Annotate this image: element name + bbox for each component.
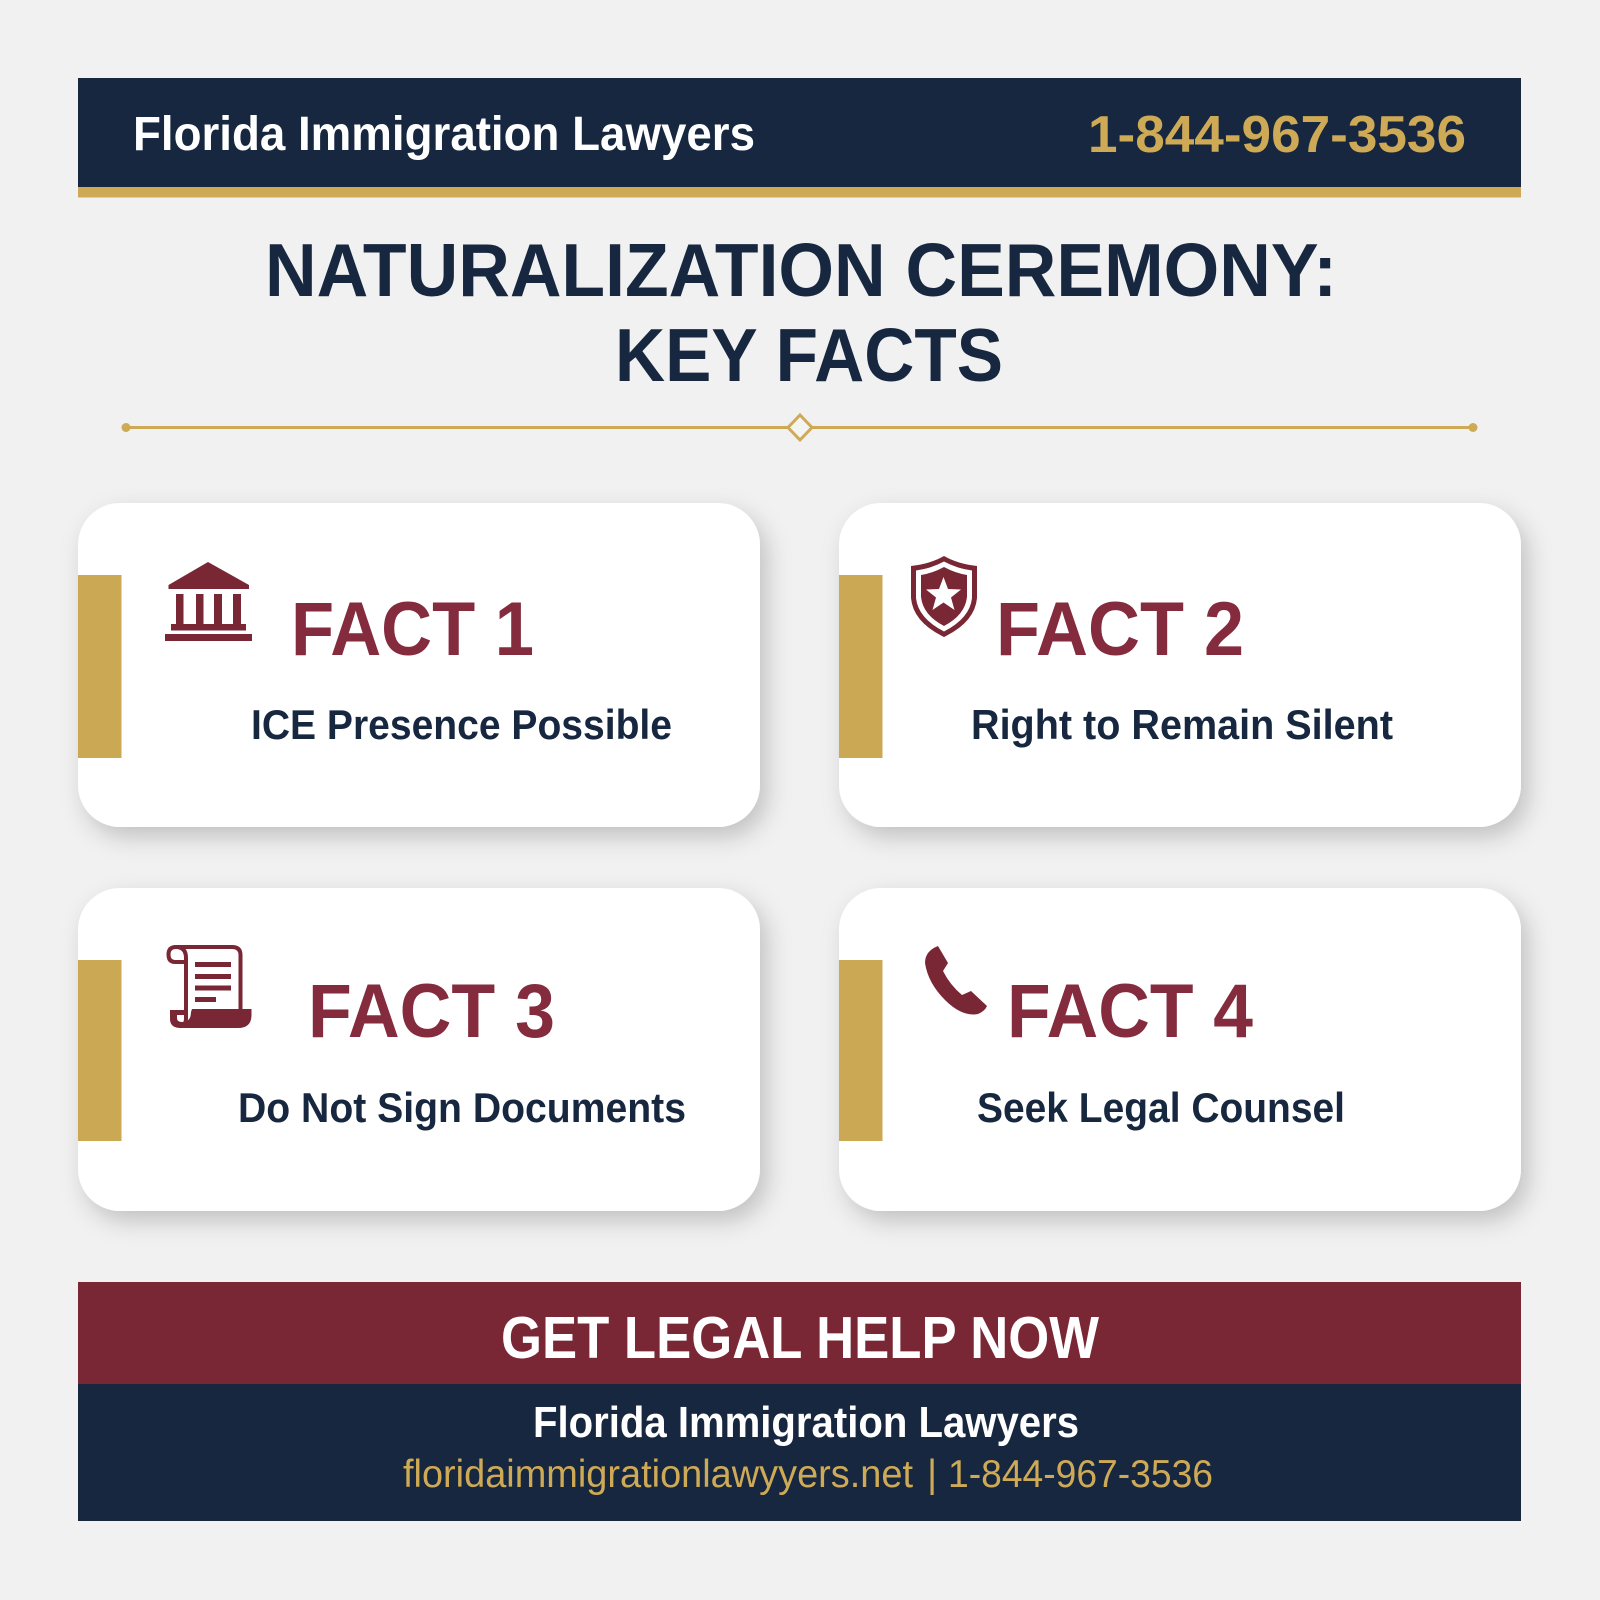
gold accent bar <box>839 960 882 1141</box>
call-to-action banner <box>78 1282 1521 1384</box>
fact 4 text: Seek Legal Counsel <box>977 1084 1345 1131</box>
fact 4 heading: FACT 4 <box>1007 969 1253 1054</box>
fact 2 text: Right to Remain Silent <box>971 701 1393 748</box>
fact 1 text: ICE Presence Possible <box>251 701 672 748</box>
fact 2 heading: FACT 2 <box>996 587 1244 672</box>
gold accent bar <box>78 960 122 1141</box>
title <box>265 228 1337 397</box>
call-to-action banner: GET LEGAL HELP NOW <box>501 1305 1099 1371</box>
title: NATURALIZATION CEREMONY: <box>265 228 1337 312</box>
fact 3 heading: FACT 3 <box>308 969 555 1054</box>
title: KEY FACTS <box>615 313 1003 397</box>
gold accent bar <box>839 575 882 758</box>
footer website and phone: | <box>927 1453 937 1496</box>
icon: courthouse <box>165 562 252 641</box>
header phone number: 1-844-967-3536 <box>1088 106 1466 164</box>
footer firm name: Florida Immigration Lawyers <box>533 1398 1079 1447</box>
icon: phone handset <box>925 946 987 1014</box>
title divider with diamond <box>122 415 1478 440</box>
fact 3 text: Do Not Sign Documents <box>238 1084 686 1131</box>
panel: fact 3 <box>78 888 760 1211</box>
footer website and phone: floridaimmigrationlawyyers.net <box>403 1453 913 1496</box>
header bar <box>78 78 1521 198</box>
fact 1 heading: FACT 1 <box>291 587 534 672</box>
footer website and phone <box>403 1453 1213 1496</box>
gold accent bar <box>78 575 122 758</box>
footer website and phone: 1-844-967-3536 <box>948 1453 1213 1496</box>
icon: scroll document <box>168 947 252 1028</box>
footer contact panel <box>78 1384 1521 1521</box>
panel: fact 4 <box>839 888 1521 1211</box>
header firm name: Florida Immigration Lawyers <box>133 108 755 161</box>
panel: fact 1 <box>78 503 760 827</box>
icon: shield with star <box>911 556 977 637</box>
panel: fact 2 <box>839 503 1521 827</box>
